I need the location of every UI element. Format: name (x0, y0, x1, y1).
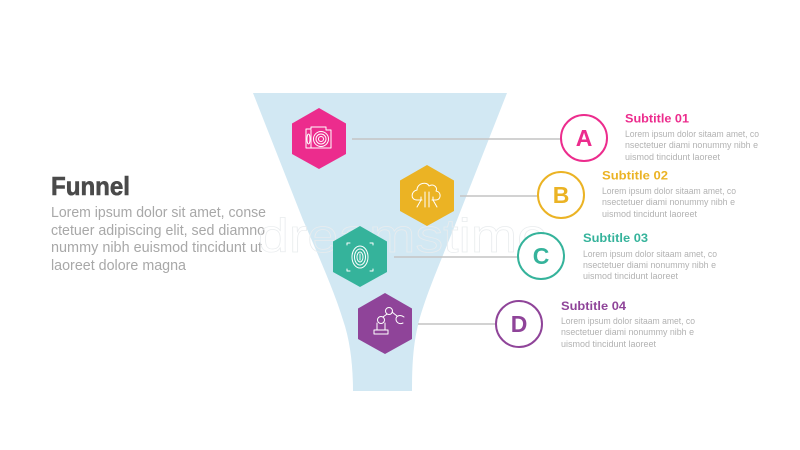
text block: subtitle 03 (583, 231, 717, 281)
circle D: D (511, 311, 527, 337)
text block: subtitle 02: uismod tincidunt laoreet (602, 209, 697, 219)
text block: subtitle 01: Lorem ipsum dolor sitaam amet, co (625, 129, 759, 139)
text block: funnel description: Lorem ipsum dolor sit amet, conse (51, 205, 266, 221)
text block: funnel description (51, 205, 266, 274)
text block: subtitle 04: nsectetuer diami nonummy nibh e (561, 327, 694, 337)
icon: camera (306, 127, 331, 148)
hexagon: camera (292, 108, 346, 169)
title: Funnel (51, 171, 130, 201)
circle B (538, 172, 584, 218)
circle A (561, 115, 607, 161)
text block: subtitle 03: Subtitle 03 (583, 231, 648, 245)
text block: subtitle 02: Lorem ipsum dolor sitaam amet, co (602, 186, 736, 196)
hexagon: robot arm (358, 293, 412, 354)
text block: subtitle 02 (602, 168, 736, 219)
icon: robot arm (374, 308, 404, 334)
text block: subtitle 04: Lorem ipsum dolor sitaam amet, co (561, 316, 695, 326)
hexagon: fingerprint (333, 226, 387, 287)
text block: subtitle 02: nsectetuer diami nonummy nibh e (602, 197, 735, 207)
text block: subtitle 01: uismod tincidunt laoreet (625, 152, 720, 162)
circle D (496, 301, 542, 347)
connector lines (352, 139, 561, 324)
funnel shape (253, 93, 507, 391)
circle B: B (553, 182, 569, 208)
text block: subtitle 04: uismod tincidunt laoreet (561, 339, 656, 349)
text block: subtitle 04 (561, 299, 695, 349)
text block: subtitle 01 (625, 112, 759, 162)
circle C: C (533, 243, 549, 269)
text block: subtitle 02: Subtitle 02 (602, 168, 668, 182)
icon: fingerprint (347, 243, 373, 271)
hexagon: cloud (400, 165, 454, 226)
watermark: dreamstime (258, 209, 548, 262)
circle A: A (576, 125, 592, 151)
text block: subtitle 04: Subtitle 04 (561, 299, 626, 313)
icon: cloud network (412, 183, 440, 207)
circle C (518, 233, 564, 279)
text block: subtitle 03: Lorem ipsum dolor sitaam amet, co (583, 249, 717, 259)
text block: funnel description: laoreet dolore magna (51, 258, 187, 274)
text block: subtitle 01: nsectetuer diami nonummy nibh e (625, 140, 758, 150)
text block: subtitle 03: uismod tincidunt laoreet (583, 271, 678, 281)
text block: subtitle 03: nsectetuer diami nonummy nibh e (583, 260, 716, 270)
text block: funnel description: ctetuer adipiscing elit, sed diamno (51, 223, 265, 239)
text block: funnel description: nummy nibh euismod tincidunt ut (51, 240, 262, 256)
text block: subtitle 01: Subtitle 01 (625, 112, 689, 126)
